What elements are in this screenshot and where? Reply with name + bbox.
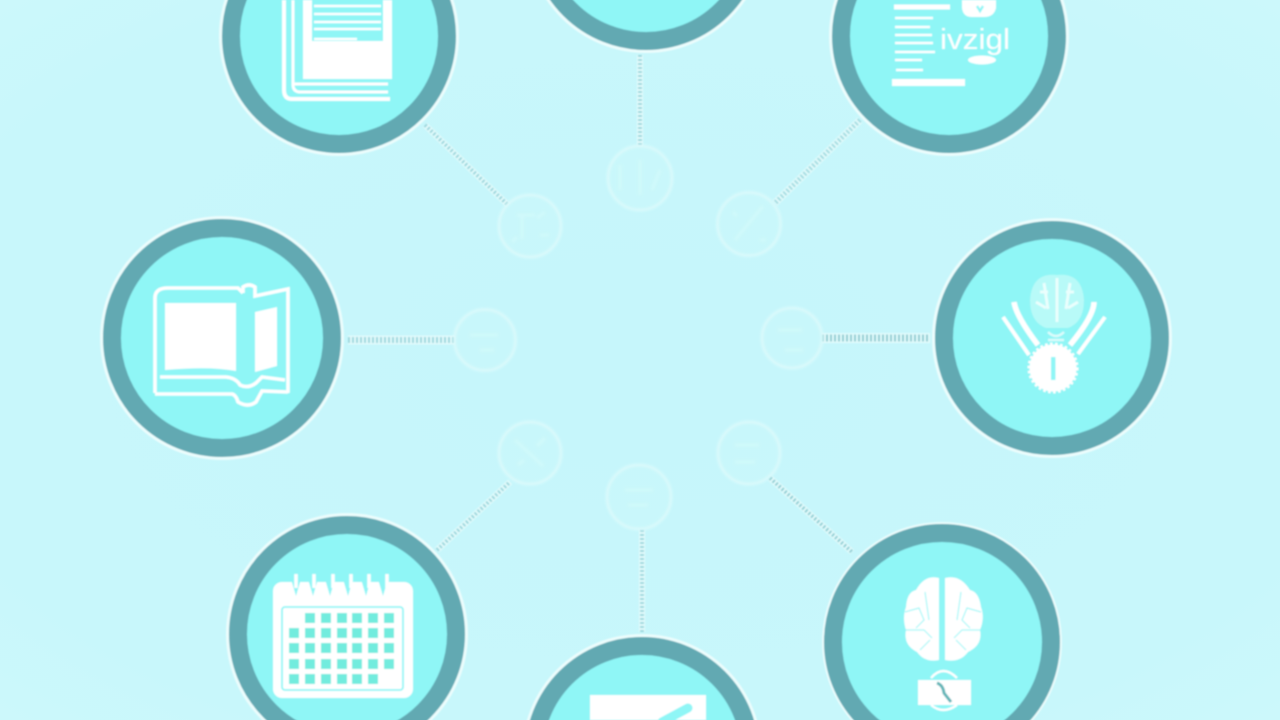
icon: slate with pen (590, 695, 706, 720)
node: lower left (499, 422, 561, 484)
connectors (348, 55, 930, 632)
icon: document lines and labels (892, 0, 1010, 86)
node: right (762, 308, 822, 368)
icon: calendar (273, 574, 413, 698)
icon: open book (155, 285, 288, 405)
node: upper right (718, 192, 780, 256)
connector: top right (775, 120, 860, 203)
icon: document lines and labels: ivzigl (940, 24, 1010, 56)
node: lower right (718, 422, 780, 484)
connector: bottom centre (639, 530, 645, 632)
icon: medal (1003, 275, 1105, 392)
connector: right (822, 333, 930, 343)
badge: stacked book (top left) (219, 0, 459, 156)
icon: brain (904, 577, 983, 661)
node: top centre (608, 146, 672, 210)
connector: top centre (637, 55, 643, 146)
icon: briefcase (918, 671, 971, 710)
node: bottom centre (607, 465, 671, 529)
badge: top centre (526, 0, 766, 53)
badge: calendar (bottom left) (226, 513, 468, 720)
small node circles (454, 146, 822, 529)
connector: bottom right (770, 478, 852, 552)
badge: document (top right) (829, 0, 1069, 156)
node: upper left (499, 195, 561, 257)
connector: top left (425, 125, 508, 205)
badge: brain and briefcase (bottom right) (822, 522, 1062, 720)
connector: bottom left (437, 482, 510, 550)
badge: open book (left) (100, 216, 344, 460)
node: left (454, 310, 516, 370)
badge: slate with pen (bottom centre) (522, 634, 762, 720)
icon: book with text panel (284, 0, 392, 99)
connector: left (348, 336, 455, 344)
badge: medal with brain (right) (932, 218, 1172, 458)
